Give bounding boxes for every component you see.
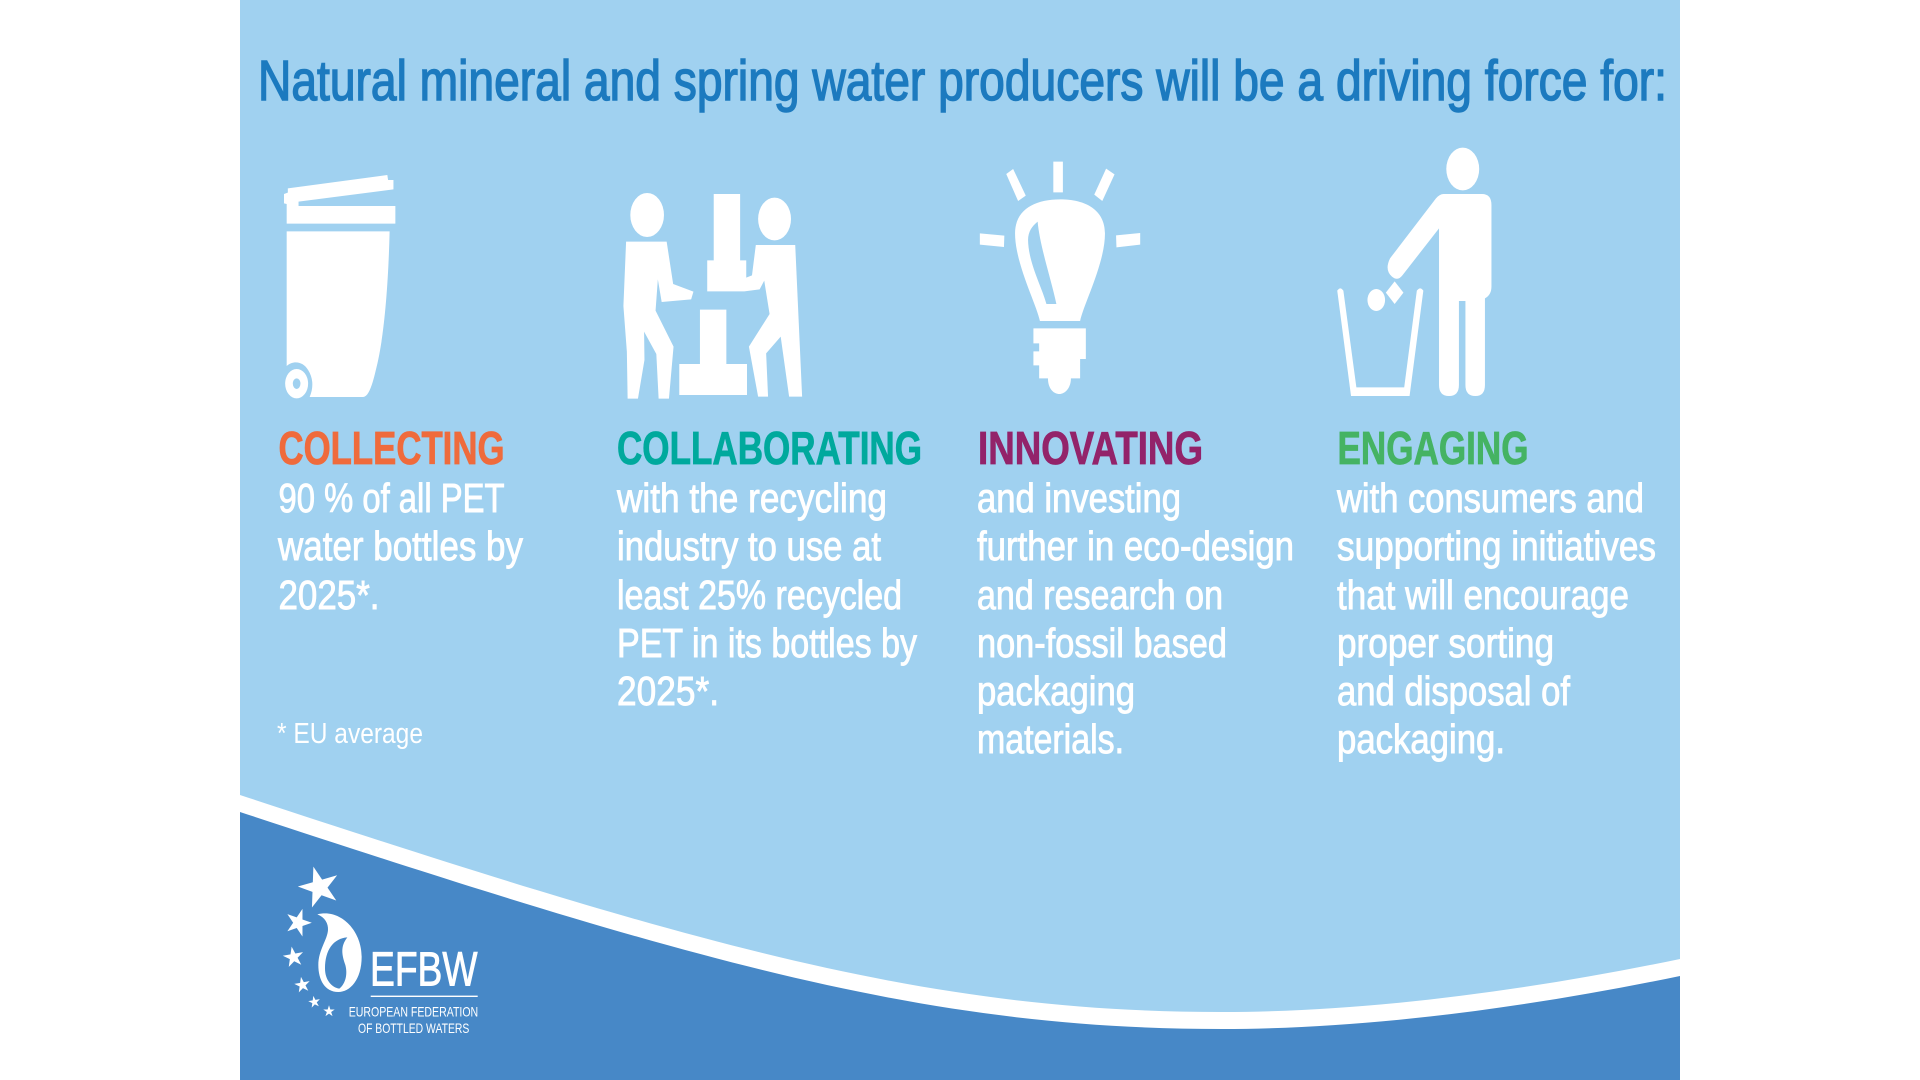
logo subtitle	[349, 1005, 478, 1036]
text: innovating description: and research on	[977, 572, 1223, 618]
white wave band	[240, 795, 1680, 1063]
text: innovating description: non-fossil based	[977, 620, 1227, 666]
text: collecting description: 2025*.	[278, 572, 380, 618]
text: collaborating description: PET in its bottles by	[617, 620, 917, 666]
text: collecting description: water bottles by	[277, 523, 523, 569]
text: collaborating description: 2025*.	[617, 668, 719, 714]
footnote: * EU average	[277, 718, 423, 750]
text: engaging description: supporting initiatives	[1337, 523, 1656, 569]
text: innovating description: packaging	[977, 668, 1135, 714]
logo subtitle: EUROPEAN FEDERATION	[349, 1005, 478, 1020]
heading: collaborating: COLLABORATING	[617, 422, 922, 474]
text: collecting description: 90 % of all PET	[278, 475, 504, 521]
icon: light bulb	[980, 162, 1140, 394]
dark blue footer wave	[240, 812, 1680, 1080]
icon: two people stacking boxes	[623, 193, 802, 399]
text: innovating description: and investing	[977, 475, 1181, 521]
panel: collecting	[277, 175, 523, 750]
text: engaging description: with consumers and	[1336, 475, 1644, 521]
text: innovating description: materials.	[977, 716, 1124, 762]
text: collaborating description	[616, 475, 917, 714]
icon: wheelie bin	[284, 175, 395, 398]
logo: EFBW	[282, 866, 478, 1036]
panel: innovating	[977, 162, 1294, 762]
panel: collaborating	[616, 193, 922, 714]
text: innovating description	[977, 475, 1294, 762]
heading: innovating: INNOVATING	[978, 422, 1203, 474]
text: engaging description	[1336, 475, 1656, 762]
text: innovating description: further in eco-design	[977, 523, 1294, 569]
text: engaging description: packaging.	[1337, 716, 1505, 762]
background panel	[240, 0, 1680, 1080]
text: engaging description: and disposal of	[1337, 668, 1571, 714]
panel: engaging	[1336, 148, 1656, 762]
heading: collecting: COLLECTING	[278, 422, 504, 474]
heading: engaging: ENGAGING	[1338, 422, 1528, 474]
logo rule	[371, 996, 478, 997]
text: collaborating description: least 25% recycled	[617, 572, 902, 618]
text: collaborating description: industry to use at	[617, 523, 882, 569]
text: engaging description: that will encourage	[1337, 572, 1629, 618]
icon: stars and water drop	[282, 866, 362, 1016]
logo subtitle: OF BOTTLED WATERS	[358, 1021, 469, 1036]
logo wordmark: EFBW	[370, 944, 478, 997]
text: collecting description	[277, 475, 523, 618]
text: collaborating description: with the recycling	[616, 475, 887, 521]
text: engaging description: proper sorting	[1337, 620, 1554, 666]
icon: person disposing of litter in a bin	[1337, 148, 1491, 396]
